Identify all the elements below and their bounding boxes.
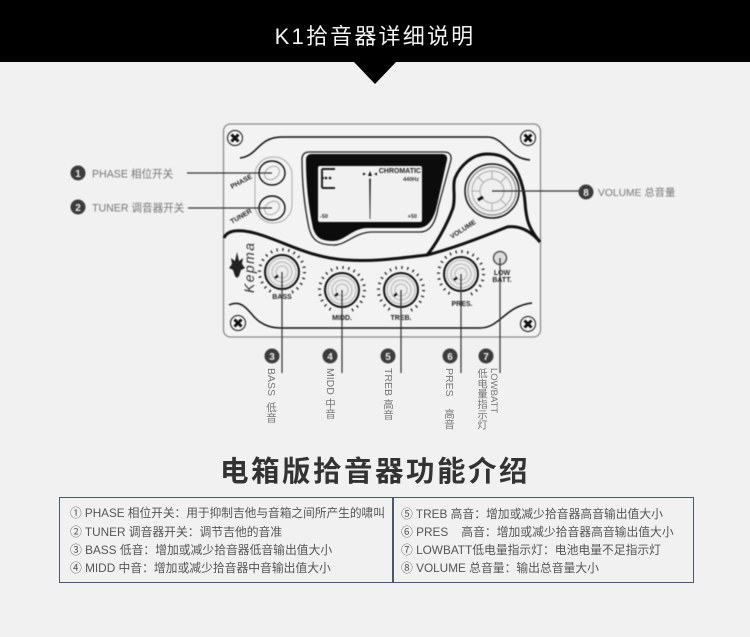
right column: ⑧ VOLUME 总音量：输出总音量大小 [401, 561, 599, 575]
leader lines [187, 173, 579, 373]
knob labels: BASS [272, 294, 292, 301]
LCD labels: CHROMATIC [379, 168, 421, 175]
PHASE and TUNER switches [230, 157, 292, 226]
LCD display: -50 [320, 214, 328, 220]
brand logo: Kepma [241, 243, 257, 293]
left column: ① PHASE 相位开关：用于抑制吉他与音箱之间所产生的啸叫 [70, 507, 385, 520]
panel curves [224, 137, 540, 328]
right column: ⑥ PRES 高音：增加或减少拾音器高音输出值大小 [401, 525, 674, 539]
LCD needle [370, 179, 371, 219]
number badges: 7 [483, 352, 489, 363]
vertical label: LOWBATT: LOWBATT [488, 368, 499, 413]
number badges: 5 [385, 352, 391, 363]
LCD display: +50 [408, 214, 417, 220]
number badges: 8 [583, 188, 589, 199]
brand logo [229, 243, 257, 293]
right column: ⑤ TREB 高音：增加或减少拾音器高音输出值大小 [401, 507, 663, 521]
right column [401, 507, 674, 575]
left column: ④ MIDD 中音：增加或减少拾音器中音输出值大小 [70, 561, 331, 575]
table divider [392, 498, 394, 582]
left column: ② TUNER 调音器开关：调节吉他的音准 [70, 525, 282, 539]
knob labels [272, 270, 512, 322]
number badges: 6 [447, 352, 453, 363]
header pointer triangle [354, 62, 396, 84]
knob labels: MIDD. [332, 315, 352, 322]
PHASE and TUNER switches: PHASE [230, 173, 254, 191]
section title: 电箱版拾音器功能介绍 [220, 456, 530, 488]
side labels [92, 168, 675, 214]
LCD note letter [322, 169, 335, 188]
side labels: TUNER 调音器开关 [92, 202, 185, 214]
knob labels: LOW [494, 270, 511, 277]
number badges: 4 [327, 352, 333, 363]
screws [228, 130, 536, 332]
side labels: VOLUME 总音量 [598, 186, 675, 199]
LCD display: 440Hz [403, 177, 419, 183]
vertical label: PRES: PRES 高音 [443, 368, 455, 429]
knob labels: PRES. [451, 301, 473, 308]
LCD display [302, 152, 451, 245]
volume knob [449, 164, 519, 241]
panel outline [224, 124, 540, 337]
function table [59, 497, 694, 583]
left column [70, 506, 385, 575]
vertical label: low battery light: 低电量指示灯 [475, 368, 486, 430]
knob labels: TREB. [390, 315, 412, 322]
PHASE and TUNER switches: TUNER [230, 208, 253, 226]
number badges [70, 166, 594, 364]
diagram: pickup control panel [70, 122, 676, 374]
number badges: 3 [269, 352, 275, 363]
vertical label: BASS: BASS 低音 [265, 368, 277, 423]
side labels: PHASE 相位开关 [92, 168, 174, 180]
number badges: 2 [75, 203, 81, 214]
right column: ⑦ LOWBATT低电量指示灯：电池电量不足指示灯 [401, 543, 661, 557]
knob labels: BATT. [492, 277, 512, 284]
header title: K1拾音器详细说明 [275, 24, 475, 49]
left column: ③ BASS 低音：增加或减少拾音器低音输出值大小 [70, 543, 332, 557]
vertical label: TREB: TREB 高音 [382, 368, 394, 420]
vertical label: MIDD: MIDD 中音 [324, 368, 336, 419]
header bar [0, 0, 750, 62]
number badges: 1 [75, 169, 81, 180]
tone knobs [260, 250, 506, 317]
volume knob: VOLUME [449, 219, 478, 241]
